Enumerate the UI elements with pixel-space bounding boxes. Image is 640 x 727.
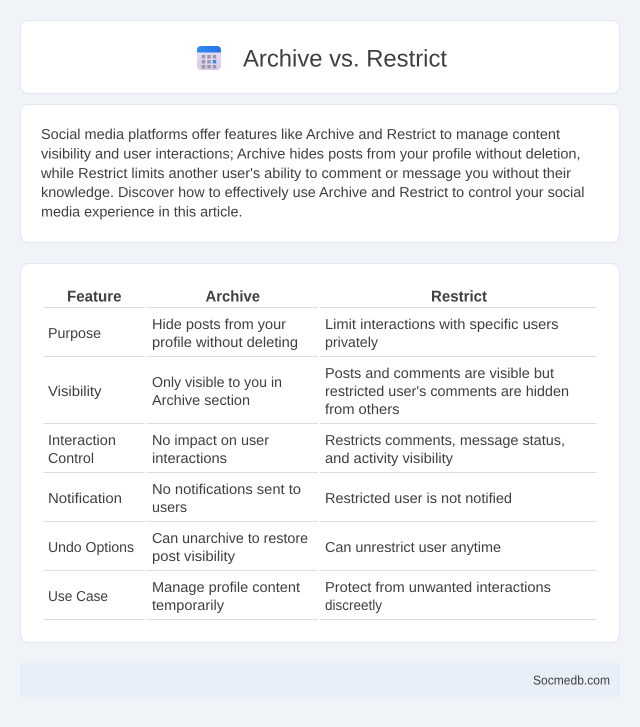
table header: Feature xyxy=(67,288,122,306)
panel: title card xyxy=(20,20,620,94)
row: Interaction Control: Restricts comments, message status, xyxy=(325,433,565,449)
row: Interaction Control: Interaction xyxy=(48,433,116,449)
panel: comparison table xyxy=(20,264,620,642)
row: Visibility: Archive section xyxy=(152,393,250,409)
row: Interaction Control: No impact on user xyxy=(152,433,269,449)
row: Visibility: from others xyxy=(325,402,400,418)
table header: Archive xyxy=(206,288,260,306)
row: Purpose xyxy=(43,317,597,357)
intro paragraph: visibility and user interactions; Archive hides posts from your profile without deletion, xyxy=(41,146,580,162)
row: Use Case: Use Case xyxy=(48,589,108,605)
row: Notification: Notification xyxy=(48,491,122,507)
row: Visibility: Visibility xyxy=(48,384,102,400)
row: Undo Options: post visibility xyxy=(152,549,236,565)
row: Undo Options xyxy=(43,531,597,571)
row: Visibility: Only visible to you in xyxy=(152,375,282,391)
row: Visibility xyxy=(43,366,597,424)
row: Purpose: privately xyxy=(325,335,379,351)
panel: intro text xyxy=(20,104,620,242)
row: Visibility: restricted user's comments are hidden xyxy=(325,384,569,400)
row: Purpose: Purpose xyxy=(48,326,101,342)
row: Purpose: profile without deleting xyxy=(152,335,298,351)
row: Purpose: Hide posts from your xyxy=(152,317,286,333)
row: Use Case: Protect from unwanted interactions xyxy=(325,580,551,596)
intro paragraph: while Restrict limits another user's ability to comment or message you without their xyxy=(40,166,571,182)
row: Use Case xyxy=(43,580,597,620)
row: Interaction Control: interactions xyxy=(152,451,227,467)
row: Notification: No notifications sent to xyxy=(152,482,301,498)
intro paragraph: media experience in this article. xyxy=(41,204,242,220)
table header xyxy=(43,288,597,308)
row: Use Case: discreetly xyxy=(325,598,383,614)
row: Undo Options: Can unarchive to restore xyxy=(152,531,308,547)
intro paragraph: knowledge. Discover how to effectively use Archive and Restrict to control your social xyxy=(41,185,584,201)
intro paragraph: Social media platforms offer features like Archive and Restrict to manage content xyxy=(41,127,560,143)
title: Archive vs. Restrict xyxy=(243,46,447,72)
footer xyxy=(20,663,620,697)
row: Use Case: temporarily xyxy=(152,598,225,614)
footer source text: Socmedb.com xyxy=(533,672,610,688)
row: Notification xyxy=(43,482,597,522)
row: Interaction Control: and activity visibility xyxy=(325,451,454,467)
row: Undo Options: Undo Options xyxy=(48,540,134,556)
row: Notification: users xyxy=(152,500,187,516)
row: Interaction Control xyxy=(43,433,597,473)
row: Visibility: Posts and comments are visible but xyxy=(325,366,554,382)
row: Undo Options: Can unrestrict user anytime xyxy=(325,540,501,556)
row: Purpose: Limit interactions with specific users xyxy=(325,317,558,333)
row: Notification: Restricted user is not notified xyxy=(325,491,512,507)
row: Use Case: Manage profile content xyxy=(152,580,300,596)
icon: calendar xyxy=(197,46,221,70)
intro paragraph xyxy=(40,127,585,220)
row: Interaction Control: Control xyxy=(48,451,94,467)
table header: Restrict xyxy=(431,288,487,306)
